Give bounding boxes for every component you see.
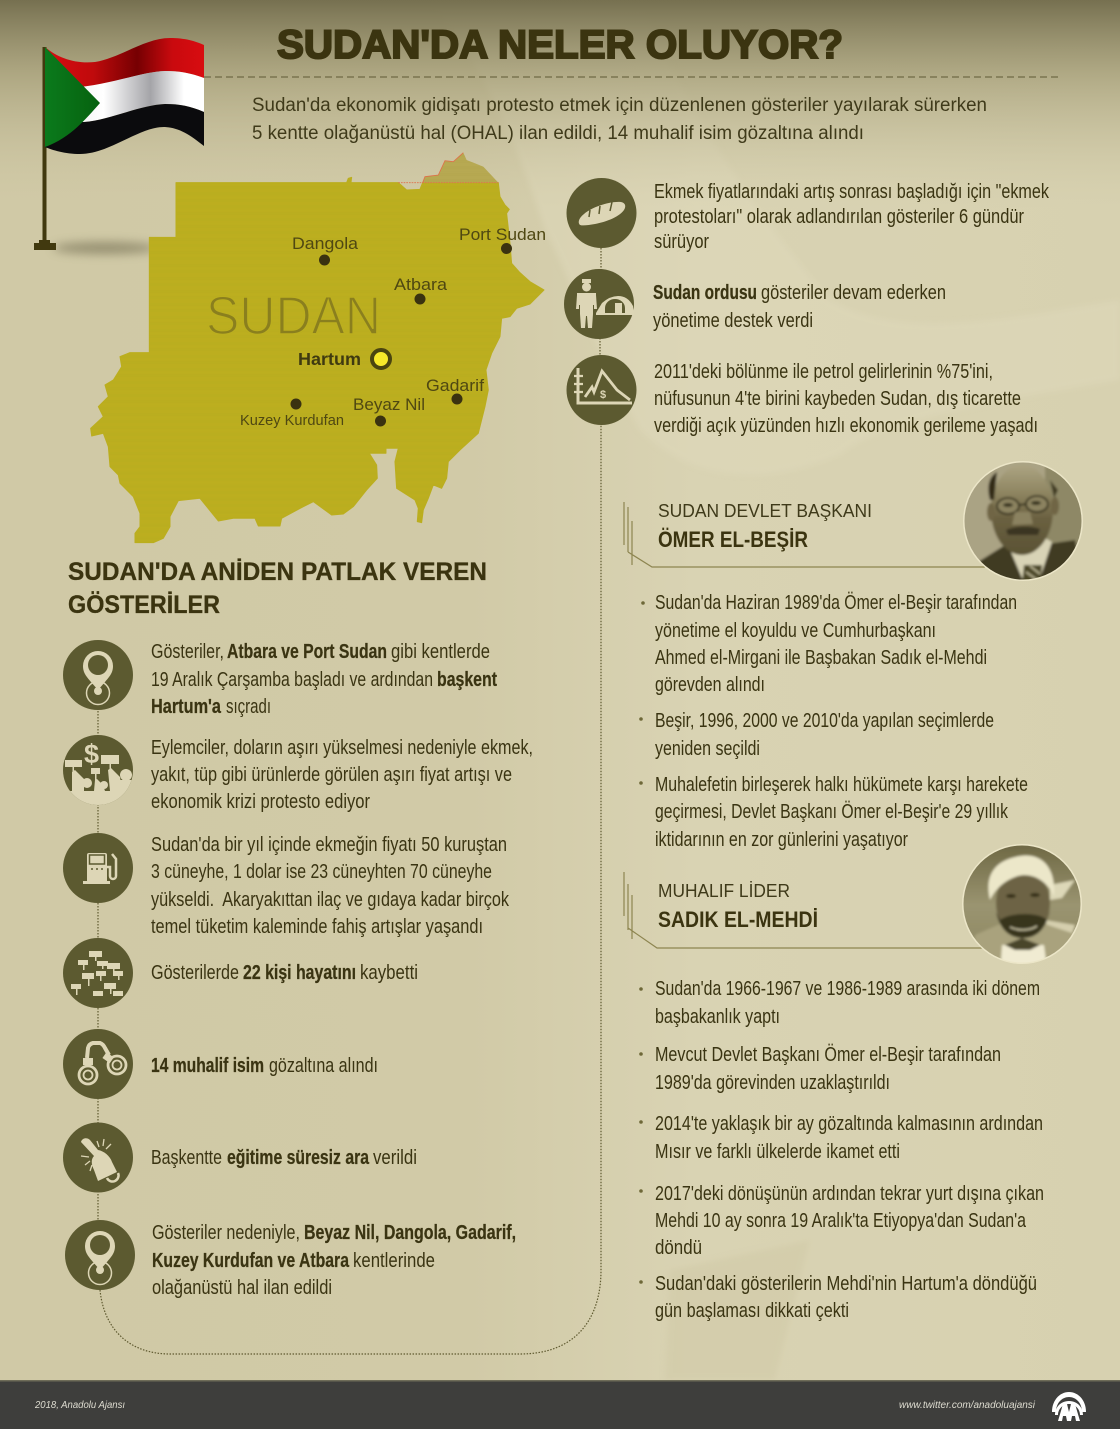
- icon: placards: [63, 938, 133, 1008]
- header: Ömer el-Beşir: [624, 501, 985, 567]
- text: army: [653, 282, 946, 332]
- text: state of emergency: Kuzey Kurdufan ve Atbara: [152, 1250, 350, 1272]
- text: deaths: Gösterilerde: [151, 962, 239, 984]
- bullets: Sadık el-Mehdi: başbakanlık yaptı: [655, 1006, 780, 1028]
- text: education: verildi: [373, 1147, 417, 1169]
- text: prices: 3 cüneyhe, 1 dolar ise 23 cüneyhten 70 cüneyhe: [151, 861, 492, 883]
- map: Sudan: [91, 153, 546, 543]
- text: bread protests: protestoları" olarak adlandırılan gösteriler 6 gündür: [654, 206, 1024, 228]
- text: protests began: Atbara ve Port Sudan: [227, 641, 387, 663]
- text: state of emergency: olağanüstü hal ilan edildi: [152, 1277, 332, 1299]
- disputed area: Halayib triangle: [398, 153, 498, 183]
- timeline dotted path: [98, 248, 601, 1354]
- city: Dangola: Dangola: [292, 234, 359, 253]
- city: Hartum: Hartum: [298, 349, 361, 369]
- footer: [0, 1380, 1120, 1429]
- portrait: Sadık el-Mehdi: [962, 844, 1082, 964]
- intro text: [252, 95, 987, 144]
- intro text: 5 kentte olağanüstü hal (OHAL) ilan edildi, 14 muhalif isim gözaltına alındı: [252, 123, 864, 144]
- city: Kuzey Kurdufan: [240, 398, 344, 429]
- bullets: Ömer el-Beşir: geçirmesi, Devlet Başkanı Ömer el-Beşir'e 29 yıllık: [655, 801, 1009, 823]
- city: Beyaz Nil: Beyaz Nil: [353, 395, 425, 414]
- text: state of emergency: [152, 1222, 516, 1299]
- icon: economic decline chart: [566, 355, 636, 425]
- bullets: Sadık el-Mehdi: döndü: [655, 1237, 702, 1259]
- intro text: Sudan'da ekonomik gidişatı protesto etmek için düzenlenen gösteriler yayılarak sürerken: [252, 95, 987, 116]
- text: state of emergency: kentlerinde: [353, 1250, 435, 1272]
- text: education: [151, 1147, 417, 1169]
- heading: protests: SUDAN'DA ANİDEN PATLAK VEREN: [68, 558, 487, 586]
- text: protests began: [151, 641, 497, 718]
- city: Atbara: [394, 275, 448, 304]
- text: education: eğitime süresiz ara: [227, 1147, 370, 1169]
- text: economy: [654, 361, 1038, 437]
- bullets: Ömer el-Beşir: Sudan'da Haziran 1989'da Ömer el-Beşir tarafından: [655, 592, 1017, 614]
- header: Sadık el-Mehdi: SADIK EL-MEHDİ: [658, 907, 818, 932]
- city: Gadarif: Gadarif: [426, 376, 484, 395]
- icon: protesters: [63, 735, 133, 805]
- bullets: Sadık el-Mehdi: Mısır ve farklı ülkelerde ikamet etti: [655, 1141, 900, 1163]
- heading: protests: GÖSTERİLER: [68, 590, 220, 619]
- city: Atbara: Atbara: [394, 275, 448, 294]
- text: protests began: 19 Aralık Çarşamba başladı ve ardından: [151, 669, 433, 691]
- header: Sadık el-Mehdi: MUHALIF LİDER: [658, 881, 790, 901]
- title: SUDAN'DA NELER OLUYOR?: [277, 23, 843, 67]
- text: bread protests: sürüyor: [654, 231, 709, 253]
- icon: bread: [566, 178, 636, 248]
- icon: fuel pump: [63, 833, 133, 903]
- text: army: Sudan ordusu: [653, 282, 757, 304]
- bullets: Ömer el-Beşir: iktidarının en zor günlerini yaşatıyor: [655, 829, 908, 851]
- bullets: Sadık el-Mehdi: Mevcut Devlet Başkanı Ömer el-Beşir tarafından: [655, 1044, 1001, 1066]
- bullets: Sadık el-Mehdi: [639, 978, 1044, 1322]
- text: demands: Eylemciler, doların aşırı yükselmesi nedeniyle ekmek,: [151, 737, 533, 759]
- flag shadow: [53, 242, 157, 254]
- text: economy: verdiği açık yüzünden hızlı ekonomik gerileme yaşadı: [654, 415, 1038, 437]
- text: protests began: Hartum'a: [151, 696, 222, 718]
- text: prices: [151, 834, 510, 938]
- bullets: Ömer el-Beşir: görevden alındı: [655, 674, 765, 696]
- city: Dangola: [292, 234, 359, 266]
- text: army: yönetime destek verdi: [653, 310, 813, 332]
- text: prices: Sudan'da bir yıl içinde ekmeğin fiyatı 50 kuruştan: [151, 834, 507, 856]
- text: demands: [151, 737, 533, 813]
- header: Ömer el-Beşir: ÖMER EL-BEŞİR: [658, 527, 808, 552]
- text: state of emergency: Beyaz Nil, Dangola, Gadarif,: [304, 1222, 516, 1244]
- city: Hartum: [298, 349, 390, 369]
- bullets: Sadık el-Mehdi: Sudan'daki gösterilerin Mehdi'nin Hartum'a döndüğü: [655, 1273, 1037, 1295]
- text: deaths: 22 kişi hayatını: [243, 962, 356, 984]
- text: protests began: başkent: [437, 669, 497, 691]
- city: Port Sudan: Port Sudan: [459, 225, 546, 244]
- text: detentions: 14 muhalif isim: [151, 1055, 264, 1077]
- city: Kuzey Kurdufan: Kuzey Kurdufan: [240, 412, 344, 429]
- bullets: Ömer el-Beşir: [639, 592, 1028, 851]
- bullets: Ömer el-Beşir: yönetime el koyuldu ve Cumhurbaşkanı: [655, 620, 936, 642]
- text: protests began: Gösteriler,: [151, 641, 224, 663]
- bullets: Sadık el-Mehdi: Mehdi 10 ay sonra 19 Aralık'ta Etiyopya'dan Sudan'a: [655, 1210, 1027, 1232]
- icon: Sudan flag: [34, 38, 204, 250]
- header: Ömer el-Beşir: SUDAN DEVLET BAŞKANI: [658, 501, 872, 521]
- text: protests began: sıçradı: [226, 696, 271, 718]
- text: detentions: gözaltına alındı: [269, 1055, 378, 1077]
- text: deaths: [151, 962, 418, 984]
- heading: protests: [68, 558, 487, 619]
- bullets: Ömer el-Beşir: Ahmed el-Mirgani ile Başbakan Sadık el-Mehdi: [655, 647, 987, 669]
- footer url: www.twitter.com/anadoluajansi: [899, 1400, 1036, 1411]
- text: demands: yakıt, tüp gibi ürünlerde görülen aşırı fiyat artışı ve: [151, 764, 512, 786]
- city: Beyaz Nil: [353, 395, 425, 426]
- bullets: Sadık el-Mehdi: gün başlaması dikkati çekti: [655, 1300, 849, 1322]
- text: economy: nüfusunun 4'te birini kaybeden Sudan, dış ticarette: [654, 388, 1021, 410]
- text: education: Başkentte: [151, 1147, 222, 1169]
- text: detentions: [151, 1055, 378, 1077]
- text: army: gösteriler devam ederken: [761, 282, 946, 304]
- icon: location pin: [63, 640, 133, 710]
- header: Sadık el-Mehdi: [624, 872, 982, 948]
- label: SUDAN: SUDAN: [206, 286, 381, 346]
- icon: soldier and barracks: [564, 269, 634, 339]
- text: economy: 2011'deki bölünme ile petrol gelirlerinin %75'ini,: [654, 361, 993, 383]
- bullets: Ömer el-Beşir: Beşir, 1996, 2000 ve 2010'da yapılan seçimlerde: [655, 710, 994, 732]
- text: prices: yükseldi. Akaryakıttan ilaç ve gıdaya kadar birçok: [151, 889, 510, 911]
- bullets: Ömer el-Beşir: yeniden seçildi: [655, 738, 760, 760]
- city: Gadarif: [426, 376, 484, 404]
- bullets: Sadık el-Mehdi: 1989'da görevinden uzaklaştırıldı: [655, 1072, 890, 1094]
- logo: AA: [1052, 1392, 1086, 1421]
- text: demands: ekonomik krizi protesto ediyor: [151, 791, 370, 813]
- city: Port Sudan: [459, 225, 546, 254]
- icon: school bell: [63, 1122, 133, 1192]
- icon: economic decline chart: $: [600, 389, 606, 401]
- portrait: Ömer el-Beşir: [963, 461, 1083, 581]
- text: state of emergency: Gösteriler nedeniyle,: [152, 1222, 300, 1244]
- bullets: Ömer el-Beşir: Muhalefetin birleşerek halkı hükümete karşı harekete: [655, 774, 1028, 796]
- text: prices: temel tüketim kaleminde fahiş artışlar yaşandı: [151, 916, 483, 938]
- text: bread protests: [654, 181, 1050, 253]
- footer credit: 2018, Anadolu Ajansı: [34, 1400, 125, 1411]
- text: deaths: kaybetti: [360, 962, 418, 984]
- icon: handcuffs: [63, 1029, 133, 1099]
- icon: location pin 2: [65, 1220, 135, 1290]
- icon: protesters: $: [84, 739, 99, 769]
- map shape: [91, 177, 544, 543]
- text: protests began: gibi kentlerde: [391, 641, 490, 663]
